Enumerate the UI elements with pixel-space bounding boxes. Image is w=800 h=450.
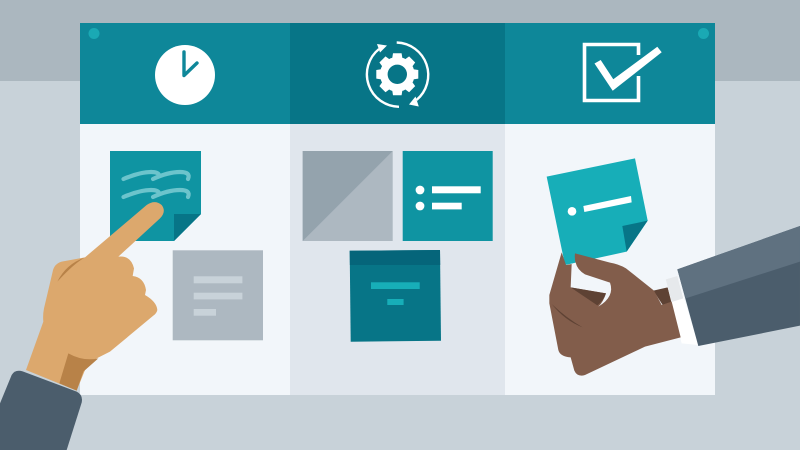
jacket sleeve: [0, 371, 82, 450]
cuff shaded part: [666, 276, 683, 302]
thumb crease: [57, 257, 85, 282]
wrist shadow: [59, 353, 98, 391]
icon: left pin: [88, 28, 100, 39]
palm shadow: [571, 287, 606, 305]
held note dot: [568, 207, 576, 216]
sticky note: grey list note: [173, 250, 263, 340]
sticky note: dark teal header note: [350, 250, 441, 342]
hand shape: [549, 252, 681, 376]
knuckle crease: [552, 304, 583, 327]
note corner fold: [174, 214, 201, 241]
finger gap: [571, 263, 611, 307]
icon: clock: [155, 45, 215, 105]
held note line: [583, 196, 632, 212]
held note fold: [622, 221, 648, 252]
icon: checkbox with tick: [584, 44, 662, 100]
hand shape: [26, 202, 164, 391]
icon: gear with rotating arrows: [367, 42, 428, 107]
icon: right pin: [698, 28, 709, 39]
wrist: [653, 287, 673, 305]
note handwriting scribbles: [124, 172, 189, 197]
sticky note: grey folded square: [303, 151, 393, 241]
shirt cuff: [666, 276, 698, 345]
sticky note: teal bullet list: [403, 151, 493, 241]
sticky note: handwriting note: [110, 151, 201, 241]
panel: board header: [80, 23, 715, 124]
illustration: pointing hand: [0, 202, 164, 450]
hand with finger gap: [549, 252, 681, 376]
suit sleeve highlight: [677, 226, 800, 298]
suit sleeve: [677, 226, 800, 346]
illustration: hand holding note: [547, 158, 800, 376]
panel: board columns: [80, 124, 715, 395]
held note: [547, 158, 648, 265]
